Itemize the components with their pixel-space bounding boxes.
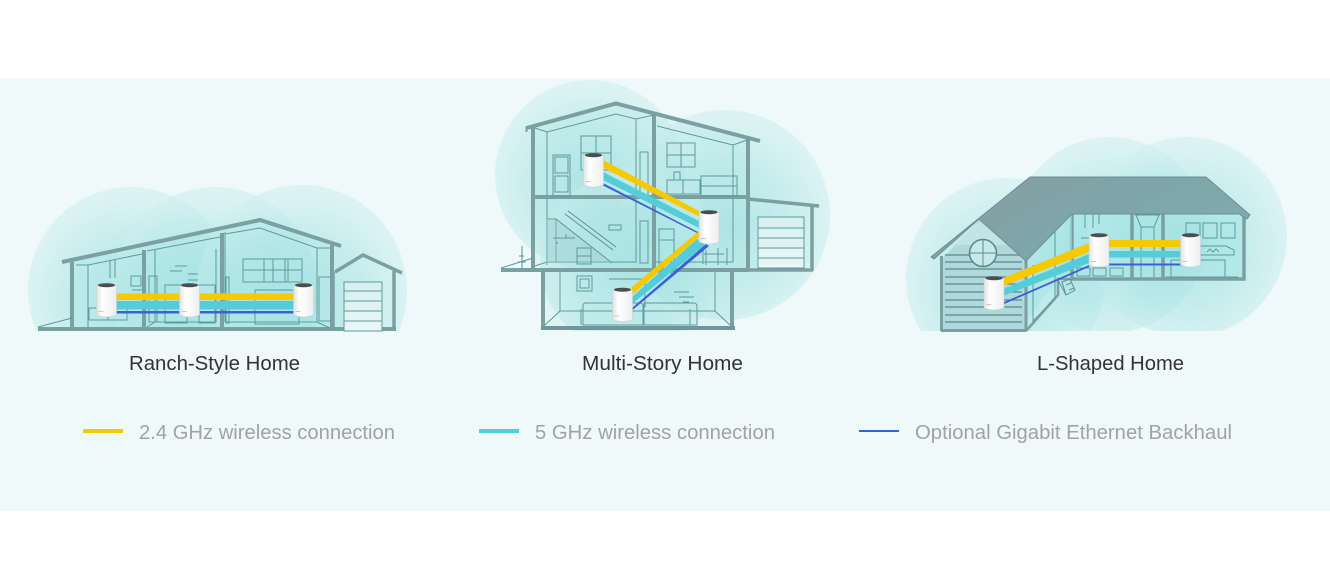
connection lines: l-shaped xyxy=(1003,240,1182,304)
legend xyxy=(83,422,1232,444)
upstairs interior xyxy=(535,114,750,196)
roof xyxy=(931,177,1250,261)
garage xyxy=(748,199,819,206)
background band xyxy=(0,78,1330,511)
house structure: ranch xyxy=(38,220,402,331)
ground floor interior xyxy=(535,198,733,266)
coverage glow: multi-story xyxy=(495,80,830,352)
doors xyxy=(149,276,333,323)
routers: ranch xyxy=(96,283,314,317)
legend: 2.4 GHz: 2.4 GHz wireless connection xyxy=(139,422,395,444)
pictures and furniture xyxy=(1077,214,1235,276)
routers: multi-story xyxy=(584,153,719,322)
connection lines: ranch xyxy=(116,294,294,314)
label: multi-story home: Multi-Story Home xyxy=(582,353,743,375)
sofas xyxy=(581,279,697,325)
left wing siding xyxy=(941,220,1026,331)
round window xyxy=(970,240,996,266)
garage xyxy=(335,255,402,273)
basement xyxy=(543,271,732,326)
right wing rooms xyxy=(1057,214,1244,279)
windows xyxy=(243,259,302,282)
coverage glow: ranch xyxy=(28,185,407,331)
staircase xyxy=(547,211,616,263)
panel: multi-story home xyxy=(495,80,830,375)
upstairs furniture xyxy=(667,172,737,196)
label: l-shaped home: L-Shaped Home xyxy=(1037,353,1184,375)
fridge and table xyxy=(553,225,727,273)
coverage glow: l-shaped xyxy=(906,137,1287,331)
panel: l-shaped home xyxy=(906,137,1287,378)
porch plant xyxy=(518,246,526,268)
connection lines: multi-story xyxy=(603,160,709,310)
routers: l-shaped xyxy=(984,233,1200,310)
panel: ranch-style home xyxy=(28,185,407,395)
legend: ethernet backhaul: Optional Gigabit Ethernet Backhaul xyxy=(915,422,1232,444)
house structure: multi-story xyxy=(501,104,819,330)
label: ranch-style home: Ranch-Style Home xyxy=(129,353,300,375)
interior lines xyxy=(76,228,330,329)
diagonal wing xyxy=(1026,214,1072,320)
furniture xyxy=(89,260,299,324)
legend: 5 GHz: 5 GHz wireless connection xyxy=(535,422,775,444)
house structure: l-shaped xyxy=(931,177,1250,331)
upstairs windows and door xyxy=(553,136,695,196)
steps xyxy=(1062,279,1075,295)
